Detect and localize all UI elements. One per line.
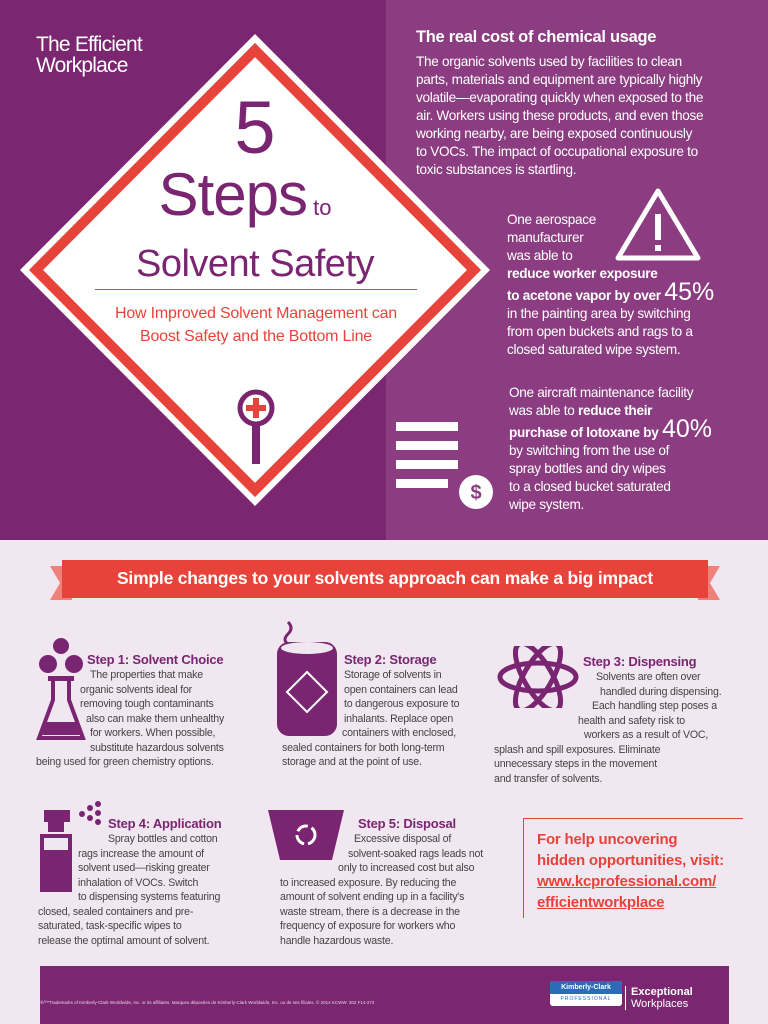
logo: Kimberly-Clark: PROFESSIONAL bbox=[561, 996, 611, 1002]
title: 5 Steps to Solvent Safety bbox=[136, 86, 374, 285]
logo: Kimberly-Clark bbox=[550, 981, 622, 1006]
stat 40%: to a closed bucket saturated bbox=[509, 479, 671, 494]
step 4: inhalation of VOCs. Switch bbox=[78, 876, 198, 888]
divider line bbox=[95, 289, 417, 290]
icon: disposal bin bbox=[268, 810, 344, 860]
heading: real cost: The real cost of chemical usage bbox=[416, 28, 656, 46]
tagline: Exceptional Workplaces bbox=[625, 986, 693, 1010]
step 1: Step 1: Solvent Choice bbox=[87, 652, 223, 667]
icon: warning triangle bbox=[616, 188, 700, 260]
step 4: rags increase the amount of bbox=[78, 848, 204, 860]
step 3: workers as a result of VOC, bbox=[584, 729, 708, 741]
step 1: also can make them unhealthy bbox=[86, 712, 224, 724]
step 5: Excessive disposal of bbox=[354, 833, 451, 845]
icon: recycle arrows bbox=[498, 646, 578, 708]
step 1: substitute hazardous solvents bbox=[90, 742, 224, 754]
stat 40%: by switching from the use of bbox=[509, 443, 669, 458]
step 5: waste stream, there is a decrease in the bbox=[280, 906, 460, 918]
footer bbox=[40, 966, 729, 1024]
step 3: health and safety risk to bbox=[578, 714, 685, 726]
step 3: unnecessary steps in the movement bbox=[494, 758, 657, 770]
step 2: open containers can lead bbox=[344, 684, 458, 696]
step 2 bbox=[277, 621, 460, 768]
step 2: Storage of solvents in bbox=[344, 669, 441, 681]
callout: help link: efficientworkplace bbox=[537, 894, 664, 911]
step 2: storage and at the point of use. bbox=[282, 756, 422, 768]
step 2: to dangerous exposure to bbox=[344, 698, 459, 710]
top left panel bbox=[0, 0, 386, 540]
step 3: Solvents are often over bbox=[596, 671, 700, 683]
intro text: volatile—evaporating quickly when exposed to the bbox=[416, 90, 703, 105]
stat 40%: was able to reduce their bbox=[509, 403, 652, 418]
intro text: parts, materials and equipment are typically highly bbox=[416, 72, 702, 87]
stat 40%: wipe system. bbox=[509, 497, 584, 512]
stat 40%: spray bottles and dry wipes bbox=[509, 461, 666, 476]
step 3 bbox=[494, 646, 721, 784]
logo: The Efficient Workplace: Workplace bbox=[36, 54, 128, 77]
stat 45%: closed saturated wipe system. bbox=[507, 342, 680, 357]
step 3: splash and spill exposures. Eliminate bbox=[494, 744, 660, 756]
step 3: Step 3: Dispensing bbox=[583, 654, 696, 669]
icon: flask with leaves bbox=[36, 638, 86, 740]
banner: Simple changes to your solvents approach can make a big impact bbox=[117, 568, 653, 588]
callout: help link: www.kcprofessional.com/ bbox=[537, 873, 716, 890]
logo: The Efficient Workplace: The Efficient bbox=[36, 33, 142, 56]
stat 45%: to acetone vapor by over 45% bbox=[507, 278, 714, 306]
step 1: The properties that make bbox=[90, 669, 203, 681]
stat 45% bbox=[507, 212, 714, 357]
step 2: containers with enclosed, bbox=[342, 727, 456, 739]
step 4: closed, sealed containers and pre- bbox=[38, 906, 193, 918]
stat 40%: One aircraft maintenance facility bbox=[509, 385, 693, 400]
tagline: Exceptional Workplaces: Workplaces bbox=[631, 998, 688, 1010]
subtitle: How Improved Solvent Management can Boost Safety and the Bottom Line bbox=[115, 305, 397, 345]
step 3: and transfer of solvents. bbox=[494, 772, 602, 784]
step 4: release the optimal amount of solvent. bbox=[38, 934, 209, 946]
stat 45%: was able to bbox=[507, 248, 572, 263]
step 5: Step 5: Disposal bbox=[358, 816, 456, 831]
step 1 bbox=[36, 638, 224, 768]
callout: help link bbox=[523, 818, 743, 918]
step 4: Step 4: Application bbox=[108, 816, 221, 831]
step 1: for workers. When possible, bbox=[90, 727, 215, 739]
title: 5 Steps to Solvent Safety: 5 bbox=[234, 86, 276, 169]
step 4: Spray bottles and cotton bbox=[108, 833, 217, 845]
step 5 bbox=[268, 810, 484, 946]
title: 5 Steps to Solvent Safety: Solvent Safety bbox=[136, 243, 374, 285]
intro text bbox=[416, 54, 703, 177]
intro text: toxic substances is startling. bbox=[416, 162, 576, 177]
icon: spray bottle bbox=[40, 801, 101, 892]
tagline: Exceptional Workplaces: Exceptional bbox=[631, 986, 693, 998]
step 1: being used for green chemistry options. bbox=[36, 756, 214, 768]
step 5: only to increased cost but also bbox=[338, 862, 474, 874]
stat 45%: from open buckets and rags to a bbox=[507, 324, 693, 339]
stat 40%: purchase of lotoxane by 40% bbox=[509, 415, 712, 443]
step 5: to increased exposure. By reducing the bbox=[280, 876, 456, 888]
icon: barrel bbox=[277, 621, 337, 736]
intro text: The organic solvents used by facilities to clean bbox=[416, 54, 682, 69]
intro text: to VOCs. The impact of occupational exposure to bbox=[416, 144, 698, 159]
step 4: saturated, task-specific wipes to bbox=[38, 920, 182, 932]
stat 45%: reduce worker exposure bbox=[507, 266, 658, 281]
icon: document with dollar bbox=[396, 422, 493, 509]
top right panel bbox=[386, 0, 768, 540]
stat 45%: in the painting area by switching bbox=[507, 306, 691, 321]
step 4 bbox=[38, 801, 221, 946]
legal text: ®/™Trademarks of Kimberly-Clark Worldwide, Inc. or its affiliates. Marques déposées de Kimberly-Clark Worldwide, Inc. ou de ses filiales. © 2014 KCWW. 302 F14-273 bbox=[40, 1000, 374, 1005]
step 1: organic solvents ideal for bbox=[80, 684, 192, 696]
icon: document with dollar: $ bbox=[470, 482, 482, 504]
step 3: Each handling step poses a bbox=[592, 700, 717, 712]
title: 5 Steps to Solvent Safety: Steps to bbox=[159, 161, 331, 228]
intro text: air. Workers using these products, and even those bbox=[416, 108, 703, 123]
step 2: sealed containers for both long-term bbox=[282, 742, 444, 754]
stat 45%: One aerospace bbox=[507, 212, 596, 227]
step 5: amount of solvent ending up in a facility's bbox=[280, 891, 464, 903]
step 4: solvent used—risking greater bbox=[78, 862, 210, 874]
step 3: handled during dispensing. bbox=[600, 686, 721, 698]
intro text: working nearby, are being exposed continuously bbox=[416, 126, 692, 141]
logo: The Efficient Workplace bbox=[36, 33, 143, 77]
step 4: to dispensing systems featuring bbox=[78, 891, 220, 903]
step 2: inhalants. Replace open bbox=[344, 712, 453, 724]
callout: help link: hidden opportunities, visit: bbox=[537, 852, 724, 869]
icon: magnifier with cross bbox=[238, 390, 274, 464]
step 5: frequency of exposure for workers who bbox=[280, 920, 455, 932]
callout: help link: For help uncovering bbox=[537, 831, 677, 848]
logo: Kimberly-Clark: Kimberly-Clark bbox=[561, 984, 611, 991]
step 1: removing tough contaminants bbox=[80, 698, 214, 710]
banner bbox=[50, 560, 720, 600]
stat 40% bbox=[509, 385, 712, 512]
step 5: solvent-soaked rags leads not bbox=[348, 848, 483, 860]
step 5: handle hazardous waste. bbox=[280, 934, 393, 946]
step 2: Step 2: Storage bbox=[344, 652, 436, 667]
diamond title panel bbox=[20, 34, 490, 506]
stat 45%: manufacturer bbox=[507, 230, 584, 245]
